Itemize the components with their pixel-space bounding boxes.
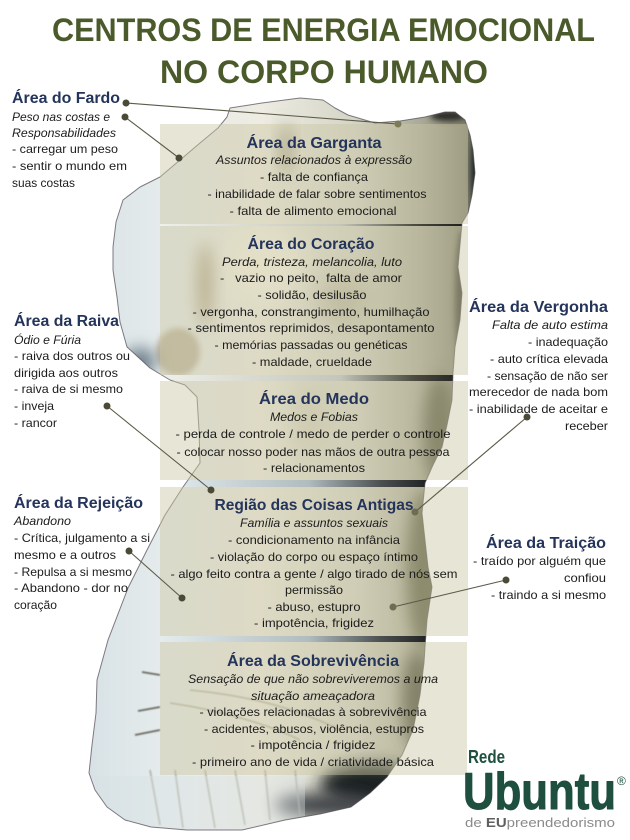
callout: Área da Raiva: - raiva dos outros ou [14,349,130,363]
panel: Área do Coração: - maldade, crueldade [252,355,372,369]
callout: Área da Vergonha: merecedor de nada bom [469,385,608,399]
torso photograph [80,90,485,840]
callout: Área da Vergonha: - sensação de não ser [487,369,608,383]
panel: Área da Sobrevivência: - primeiro ano de vida / criatividade básica [192,755,434,769]
drapery folds [150,690,340,828]
callout: Área da Raiva: Ódio e Fúria [14,332,81,347]
panel: Região das Coisas Antigas: - violação do corpo ou espaço íntimo [210,550,418,564]
panel: Área do Coração: - sentimentos reprimidos, desapontamento [188,321,435,335]
callout: Área da Raiva: - inveja [14,399,54,413]
panel: Área da Garganta: - falta de alimento emocional [230,204,396,218]
callout: Área da Traição: confiou [564,571,606,585]
panel: Região das Coisas Antigas [170,497,458,630]
callout: Área da Traição: - traindo a si mesmo [491,588,606,602]
callout: Área da Rejeição: mesmo e a outros [14,548,116,562]
horizontal gaps between panels [160,224,465,642]
callout: Área da Raiva: dirigida aos outros [14,366,118,380]
callout: Área do Fardo: Peso nas costas e [12,110,110,124]
panel: Área da Garganta: Área da Garganta [246,133,382,152]
panel: Área do Medo: Área do Medo [259,389,369,408]
callout: Área do Fardo: Área do Fardo [12,88,120,107]
panel: Região das Coisas Antigas: - algo feito contra a gente / algo tirado de nós sem [170,567,458,581]
panel: Área do Coração: - solidão, desilusão [258,288,367,302]
callout: Área da Vergonha: - inabilidade de aceitar e [469,402,608,416]
title: CENTROS DE ENERGIA EMOCIONAL [52,12,595,48]
callout: Área do Fardo: Responsabilidades [12,126,116,140]
chest highlight and breast shadows [198,124,371,460]
panel: Área da Sobrevivência: - acidentes, abusos, violência, estupros [204,722,424,736]
callout: Área do Fardo: - sentir o mundo em [12,159,127,173]
panel: Área do Coração [188,234,435,369]
title [52,12,595,90]
panel: Área da Sobrevivência: Sensação de que não sobreviveremos a uma [188,672,438,686]
dark right flank shading [275,111,485,817]
panel: Área do Medo: Medos e Fobias [270,410,358,424]
panel: Área da Garganta: - inabilidade de falar sobre sentimentos [208,187,426,201]
callout: Área da Traição: - traído por alguém que [473,554,606,568]
panel: Área da Garganta: - falta de confiança [260,170,368,184]
logo: Rede Ubuntu: ® [617,774,626,788]
panel: Área do Medo: - perda de controle / medo de perder o controle [176,427,451,441]
logo: Rede Ubuntu: Rede [468,747,505,767]
arm stump [124,328,200,376]
callout: Área da Vergonha [469,297,608,433]
callout: Área da Rejeição: Área da Rejeição [14,493,143,512]
callout: Área da Vergonha: receber [565,419,608,433]
panel: Região das Coisas Antigas: Família e assuntos sexuais [240,516,388,530]
title: NO CORPO HUMANO [160,54,488,90]
callout: Área da Traição [473,533,606,602]
panel: Área da Sobrevivência: situação ameaçadora [251,689,375,703]
panel: Região das Coisas Antigas: - impotência, frigidez [254,616,374,630]
panel: Área da Sobrevivência: - impotência / frigidez [250,738,376,752]
leader dots [104,100,530,610]
dark fold marks at the left hip [135,672,160,735]
callout: Área da Traição: Área da Traição [486,533,606,552]
callout: Área da Raiva [14,311,130,430]
panel: Região das Coisas Antigas: permissão [285,583,343,597]
callout: Área do Fardo [12,88,127,190]
callout: Área da Rejeição: - Repulsa a si mesmo [14,565,132,579]
panel: Região das Coisas Antigas: - condicionamento na infância [228,533,400,547]
callout: Área da Raiva: Área da Raiva [14,311,119,330]
panel: Área da Garganta: Assuntos relacionados à expressão [215,153,412,167]
translucent panels [160,124,468,775]
logo: Rede Ubuntu: de EUpreendedorismo [465,815,615,830]
callout: Área da Rejeição: coração [14,598,57,612]
panel: Área do Coração: - memórias passadas ou genéticas [214,338,408,352]
panel: Região das Coisas Antigas: - abuso, estupro [268,600,361,614]
callout: Área do Fardo: suas costas [12,176,75,190]
panel: Área do Medo: - relacionamentos [263,461,365,475]
callout: Área da Rejeição: Abandono [13,514,71,528]
callout: Área da Raiva: - raiva de si mesmo [14,382,123,396]
panel: Região das Coisas Antigas: Região das Coisas Antigas [214,497,414,514]
panel: Área da Sobrevivência: Área da Sobrevivência [227,651,399,670]
callout: Área da Rejeição: - Abandono - dor no [14,581,128,595]
panel: Área do Coração: - vazio no peito, falta de amor [220,271,402,285]
callout: Área da Rejeição [13,493,150,612]
logo: Rede Ubuntu [463,747,626,830]
panel: Área da Sobrevivência [188,651,438,769]
callout: Área da Rejeição: - Crítica, julgamento a si [14,531,150,545]
callout: Área da Vergonha: Área da Vergonha [469,297,608,316]
panel: Área do Coração: Perda, tristeza, melancolia, luto [222,255,402,269]
callout: Área da Vergonha: - auto crítica elevada [490,352,608,366]
panel: Área da Sobrevivência: - violações relacionadas à sobrevivência [200,705,427,719]
panel: Área do Medo: - colocar nosso poder nas mãos de outra pessoa [176,445,450,459]
panel: Área do Coração: - vergonha, constrangimento, humilhação [192,305,430,319]
callout: Área da Vergonha: Falta de auto estima [492,318,608,332]
panel: Área do Coração: Área do Coração [248,234,375,253]
callout: Área do Fardo: - carregar um peso [12,142,118,156]
leader lines [107,103,527,607]
panel: Área do Medo [176,389,451,475]
callout: Área da Raiva: - rancor [14,416,57,430]
callout: Área da Vergonha: - inadequação [528,335,608,349]
panel: Área da Garganta [208,133,426,218]
